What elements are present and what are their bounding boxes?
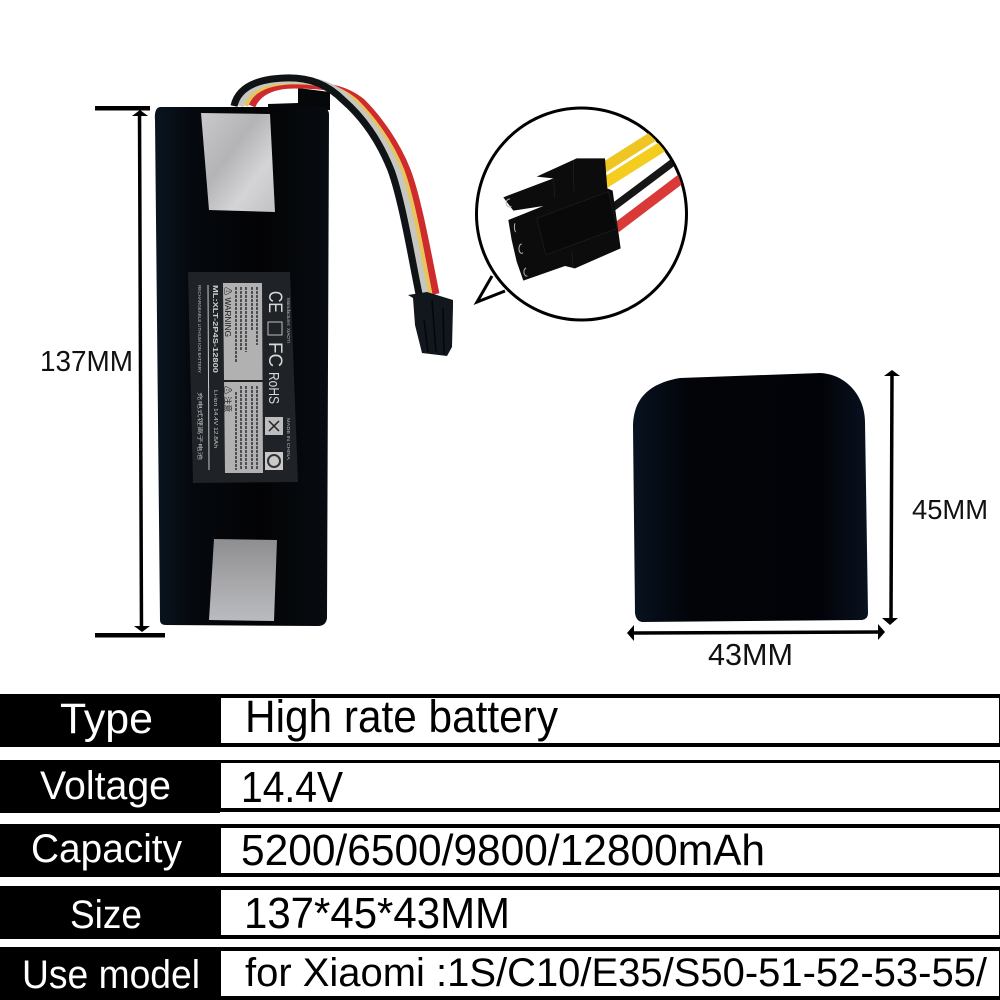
spec row: Voltage: Voltage — [40, 764, 171, 808]
spec row: Capacity: Capacity — [31, 827, 182, 871]
spec row: Size: 137*45*43MM — [244, 889, 510, 938]
close-up wires — [600, 132, 686, 228]
dimension: 43MM width arrow — [627, 624, 885, 641]
spec row: Type: High rate battery — [245, 691, 558, 742]
product label: CE — [264, 291, 285, 313]
label: 137MM: 137MM — [40, 346, 133, 378]
cable stub block — [268, 88, 330, 110]
spec row: Use model: for Xiaomi :1S/C10/E35/S50-51-52-53-55/ — [245, 951, 988, 995]
spec row: Size: Size — [70, 893, 142, 937]
product label: ⚠ WARNING — [223, 287, 232, 337]
battery cable and connector — [234, 78, 453, 356]
product label: MADE IN CHINA — [286, 418, 291, 460]
callout: connector close-up — [476, 108, 686, 320]
label grey warning panel — [223, 283, 263, 473]
bottom silver sticker — [209, 539, 277, 621]
product label: Manufacturer: XIAOTI — [286, 298, 291, 343]
spec row: Use model: Use model — [22, 953, 200, 997]
spec row: Capacity — [0, 824, 1000, 877]
product label: 充电式锂离子电池 — [196, 392, 204, 461]
callout tail — [477, 276, 505, 302]
top silver sticker — [201, 113, 275, 212]
battery body — [155, 107, 329, 626]
spec row: Size — [0, 886, 1000, 939]
product label: ML:XLT-2P4S-12800 — [211, 285, 218, 373]
dimension: 45MM height arrow — [882, 370, 900, 625]
spec row: Capacity: 5200/6500/9800/12800mAh — [241, 826, 765, 875]
battery end view — [633, 373, 868, 622]
label text: RECHARGEABLE LITHIUM ION BATTERY — [197, 285, 202, 373]
product label: Li-ion 14.4V 12.8Ah — [212, 390, 218, 448]
four-colour wire bundle — [234, 78, 436, 294]
label: 43MM: 43MM — [708, 637, 793, 672]
close-up connector housing — [503, 158, 621, 281]
product label: ⚠ 注意 — [223, 386, 233, 412]
product label: RoHS — [265, 372, 282, 404]
spec row: Voltage: 14.4V — [241, 763, 344, 812]
dimension: 137MM height arrow — [95, 106, 165, 638]
small black connector — [408, 292, 453, 356]
spec row: Voltage — [0, 760, 1000, 813]
callout circle — [476, 108, 686, 320]
product label — [188, 272, 298, 483]
product label: FC — [264, 342, 285, 367]
spec row: Use model — [0, 947, 1000, 1000]
label: 45MM: 45MM — [912, 494, 988, 525]
spec row: Type — [0, 691, 1000, 747]
spec row: Type: Type — [60, 695, 153, 743]
